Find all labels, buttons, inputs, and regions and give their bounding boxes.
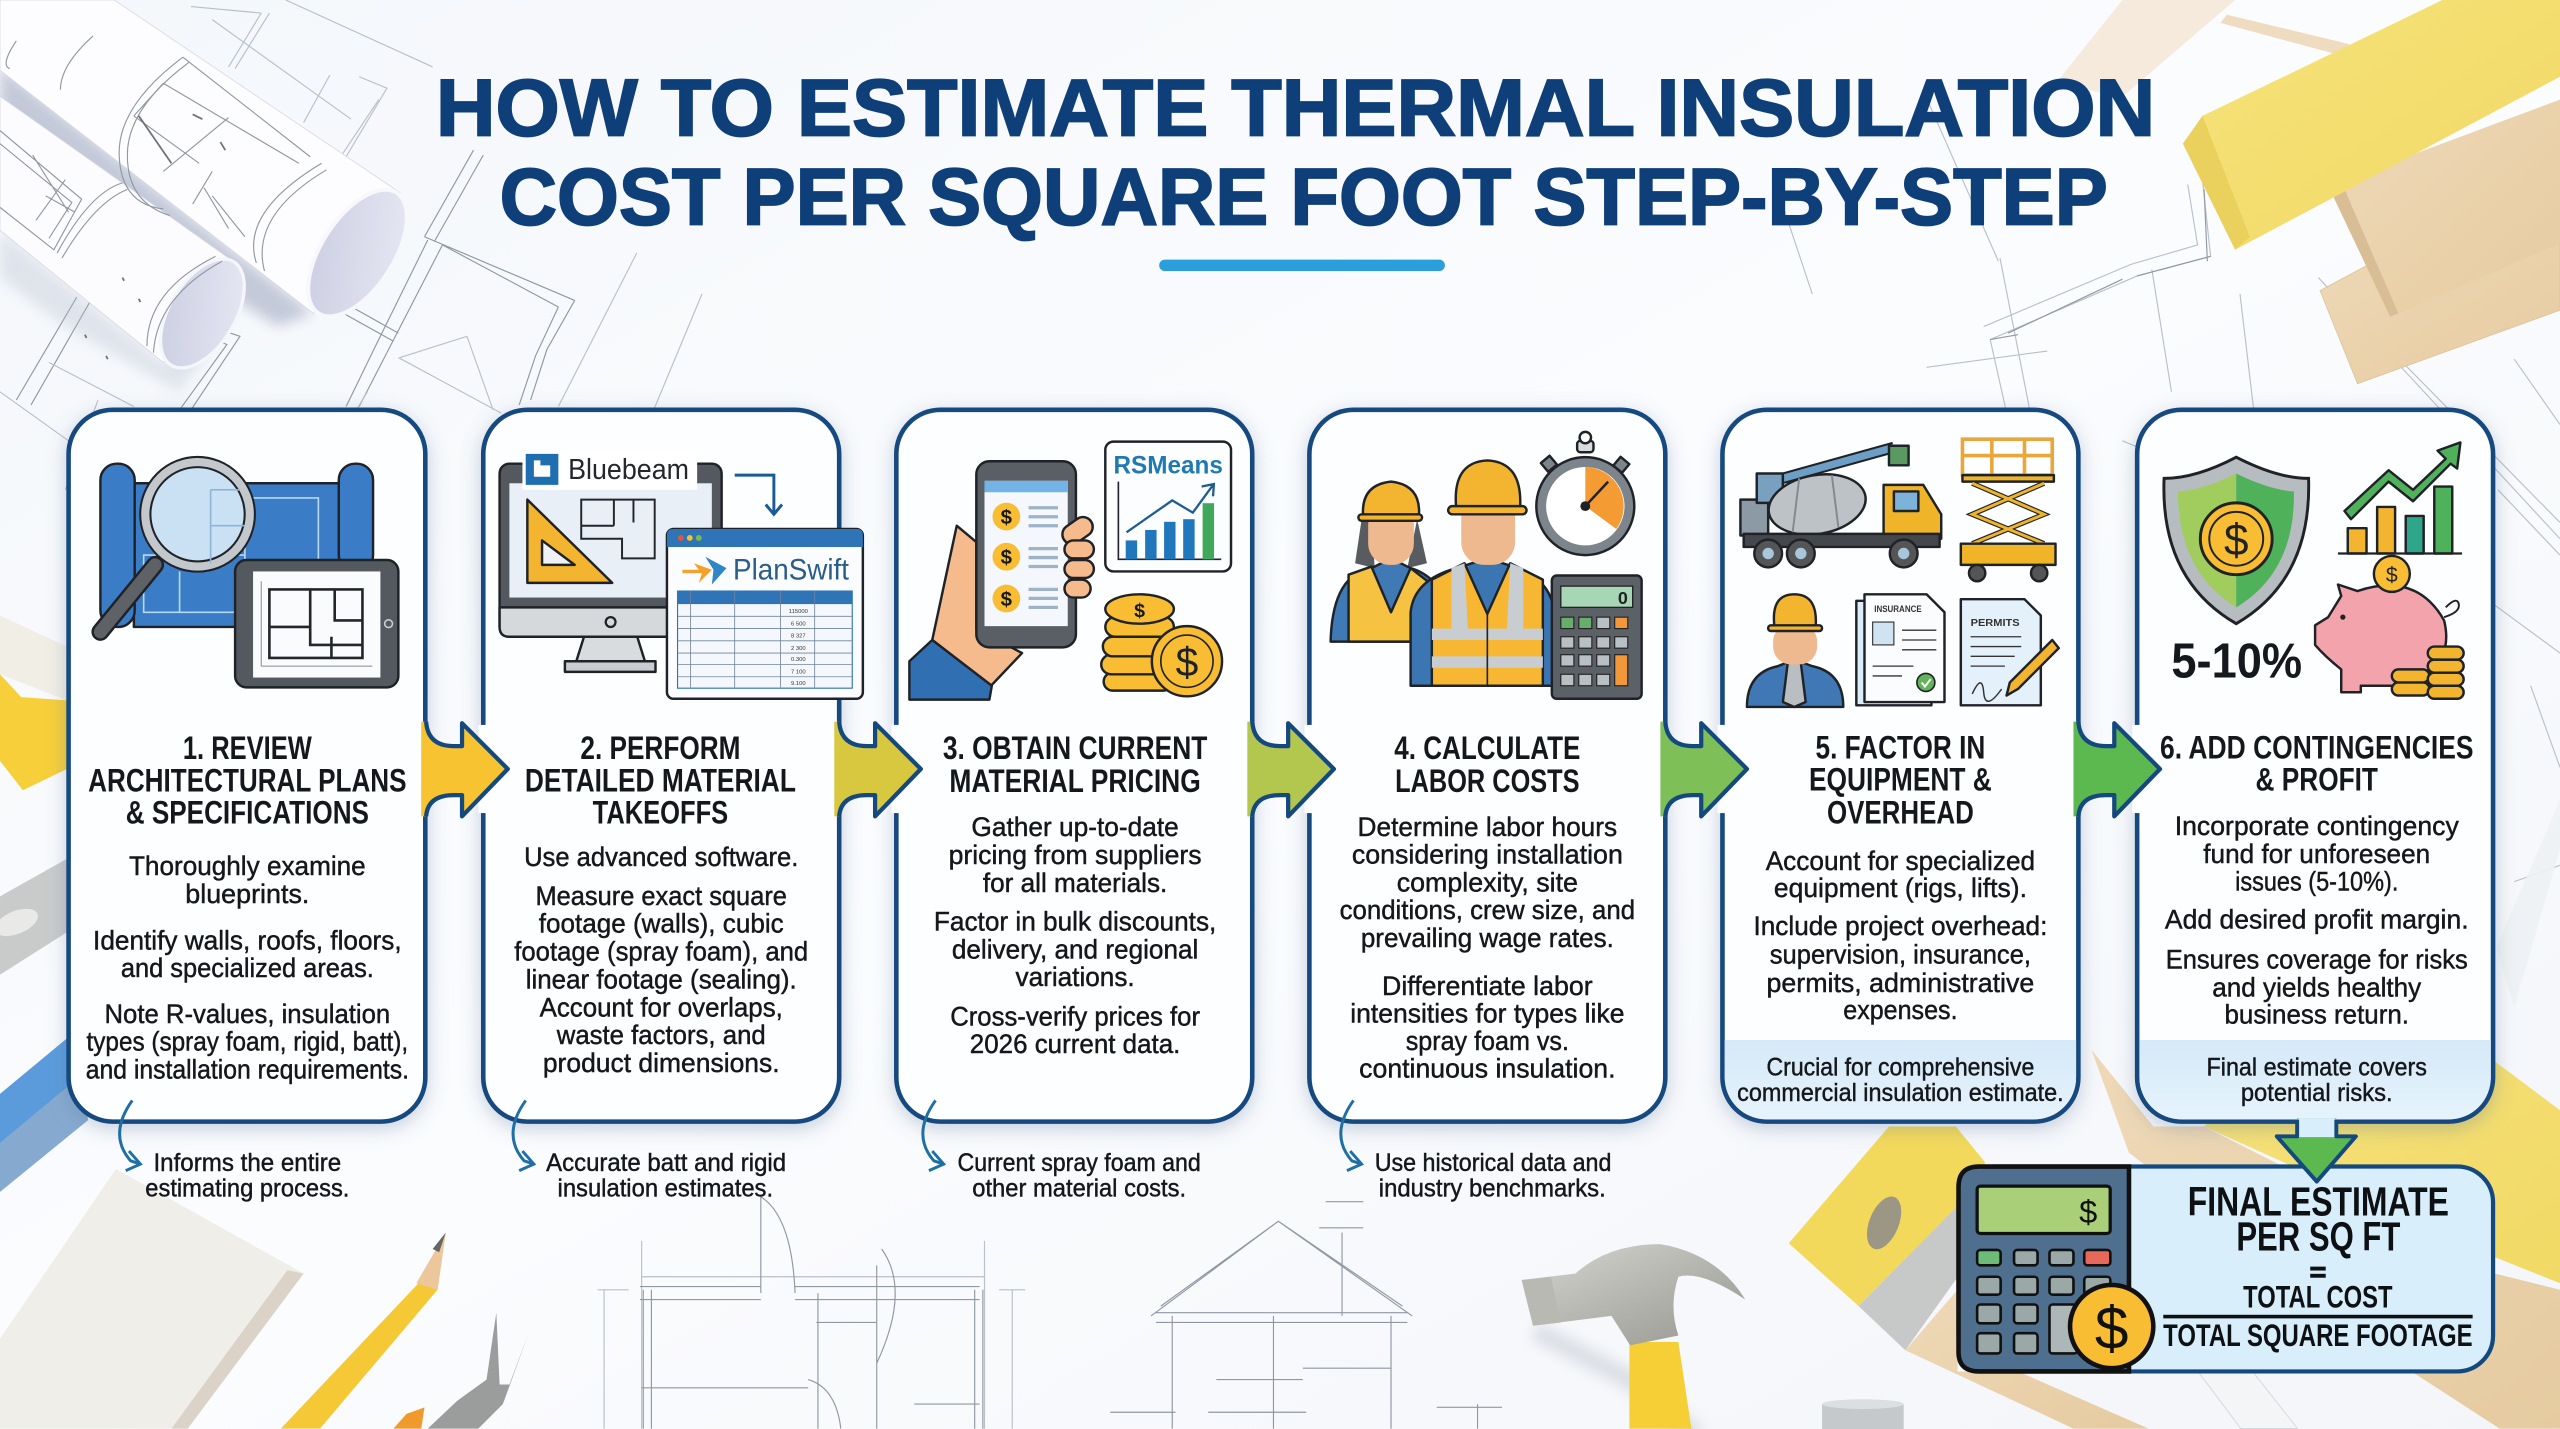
arrow: step 2 to 3 — [834, 722, 921, 816]
panel: step 5 equipment and overhead — [1722, 410, 2078, 1122]
caption: step 3 outcome: Current spray foam and — [958, 1149, 1201, 1177]
caption: step 1 outcome: estimating process. — [145, 1175, 349, 1203]
step 5 body text: supervision, insurance, — [1770, 939, 2031, 969]
step 1 heading: ARCHITECTURAL PLANS — [88, 762, 407, 799]
background: hammer — [1522, 1244, 1745, 1429]
icon: calculator with dollar coin: $ — [2095, 1294, 2128, 1362]
step 4 body text: prevailing wage rates. — [1361, 923, 1614, 953]
step 6 callout text — [2207, 1054, 2427, 1107]
step 1 heading: 1. REVIEW — [183, 729, 312, 766]
calculator: 0 — [1618, 588, 1628, 608]
step 1 heading: & SPECIFICATIONS — [126, 794, 369, 831]
icon: insurance document — [1856, 594, 1944, 705]
step 4 heading: LABOR COSTS — [1395, 762, 1580, 799]
step 5 callout band — [1725, 1040, 2076, 1119]
takeoff spreadsheet — [678, 591, 852, 688]
step 5 heading: OVERHEAD — [1827, 793, 1974, 830]
step 6 heading — [2160, 728, 2473, 798]
arrow: step 4 to 5 — [1660, 722, 1747, 816]
step 5 callout text: Crucial for comprehensive — [1767, 1054, 2034, 1082]
step 1 body text: blueprints. — [185, 879, 309, 909]
caption: step 3 outcome — [923, 1100, 1201, 1203]
step 4 body text: Determine labor hours — [1358, 812, 1617, 842]
step 6 callout text: Final estimate covers — [2207, 1054, 2427, 1082]
step 6 body text: Incorporate contingency — [2175, 811, 2459, 841]
stopwatch — [1536, 432, 1634, 555]
title underline — [1159, 260, 1445, 271]
arrow: step 3 to 4 — [1247, 722, 1334, 816]
step 5 body text: permits, administrative — [1767, 968, 2034, 998]
step 5 body text: expenses. — [1843, 995, 1958, 1025]
caption: step 2 outcome: insulation estimates. — [558, 1175, 773, 1203]
background: pliers — [393, 1313, 529, 1429]
caption: step 2 outcome — [513, 1100, 786, 1203]
takeoff spreadsheet: 9.100 — [791, 681, 806, 687]
step 1 body text: Note R-values, insulation — [104, 999, 390, 1029]
icon: concrete truck — [1740, 446, 1941, 567]
icon: hand with phone, RSMeans chart, coins: $ — [1176, 639, 1199, 685]
step 3 heading — [943, 729, 1207, 799]
panel: step 6 contingencies and profit — [2137, 410, 2493, 1122]
icon: piggy bank with coins — [2315, 556, 2464, 699]
takeoff spreadsheet: 0.300 — [791, 657, 806, 663]
icon: bar chart with arrow — [2338, 442, 2462, 553]
step 3 body text — [934, 812, 1216, 1059]
background: tools on the left edge — [0, 616, 304, 1429]
step 1 body text: types (spray foam, rigid, batt), — [87, 1027, 408, 1057]
step 6 heading: 6. ADD CONTINGENCIES — [2160, 728, 2473, 765]
Bluebeam logo: Bluebeam — [568, 454, 689, 486]
step 5 callout text — [1737, 1054, 2064, 1107]
title — [436, 64, 2155, 242]
step 4 body text: spray foam vs. — [1406, 1026, 1569, 1056]
caption: step 1 outcome: Informs the entire — [153, 1149, 341, 1177]
icon: hand with phone, RSMeans chart, coins: $ — [1134, 600, 1145, 622]
step 3 body text: variations. — [1016, 962, 1135, 992]
background: pencil — [281, 1233, 446, 1429]
calculator — [1552, 576, 1642, 699]
step 4 heading: 4. CALCULATE — [1394, 729, 1580, 766]
caption: step 4 outcome: Use historical data and — [1375, 1149, 1611, 1177]
icon: calculator with dollar coin — [1959, 1167, 2153, 1371]
step 3 body text: 2026 current data. — [970, 1029, 1180, 1059]
step 4 body text: Differentiate labor — [1382, 971, 1593, 1001]
takeoff spreadsheet: 6 500 — [791, 621, 806, 627]
step 5 body text: Account for specialized — [1766, 846, 2035, 876]
icon: blueprint, magnifier and tablet — [100, 462, 398, 687]
step 6 callout text: potential risks. — [2241, 1079, 2393, 1107]
5-10% label: 5-10% — [2171, 635, 2302, 689]
step 4 body text: considering installation — [1352, 840, 1623, 870]
panel: final estimate formula — [1959, 1167, 2493, 1371]
step 3 body text: delivery, and regional — [952, 934, 1198, 964]
takeoff spreadsheet: 8 327 — [791, 634, 806, 640]
step 1 body text: and installation requirements. — [86, 1054, 409, 1084]
icon: permits document: PERMITS — [1971, 618, 2020, 629]
front roll — [0, 0, 427, 333]
step 2 heading: 2. PERFORM — [580, 729, 740, 766]
male worker — [1411, 460, 1554, 686]
step 3 body text: pricing from suppliers — [949, 840, 1202, 870]
step 3 heading: MATERIAL PRICING — [949, 762, 1201, 799]
background: scraper, wood and foam bottom right — [1789, 800, 2560, 1429]
takeoff spreadsheet: 115000 — [789, 609, 809, 615]
takeoff spreadsheet: 7 100 — [791, 669, 806, 675]
roll shadows — [0, 65, 313, 327]
arrow: step 1 to 2 — [421, 722, 508, 816]
step 4 body text: conditions, crew size, and — [1340, 895, 1635, 925]
formula text: PER SQ FT — [2236, 1213, 2400, 1259]
female worker — [1331, 482, 1437, 642]
takeoff spreadsheet: 2 300 — [791, 646, 806, 652]
step 6 body text: issues (5-10%). — [2235, 866, 2398, 896]
arrow: step 6 to final estimate — [2277, 1118, 2356, 1182]
icon: monitor, Bluebeam and PlanSwift — [500, 452, 863, 699]
step 5 callout text: commercial insulation estimate. — [1737, 1079, 2064, 1107]
caption: step 3 outcome: other material costs. — [972, 1175, 1186, 1203]
step 4 body text: intensities for types like — [1350, 999, 1624, 1029]
background: can — [1822, 1399, 1904, 1429]
step 2 body text: Account for overlaps, — [540, 992, 783, 1022]
PlanSwift logo: PlanSwift — [733, 554, 849, 587]
step 2 heading: DETAILED MATERIAL — [525, 762, 796, 799]
step 1 body text — [86, 851, 409, 1084]
formula text: FINAL ESTIMATE — [2188, 1179, 2449, 1225]
step 2 body text: waste factors, and — [556, 1020, 766, 1050]
step 2 heading: TAKEOFFS — [593, 794, 728, 831]
icon: insurance document: INSURANCE — [1874, 604, 1922, 614]
step 2 heading — [525, 729, 796, 831]
icon: hand with phone, RSMeans chart, coins: $ — [1001, 547, 1013, 569]
step 1 body text: Identify walls, roofs, floors, — [93, 925, 402, 955]
panel: step 2 material takeoffs — [483, 410, 863, 1122]
step 5 heading — [1809, 728, 1992, 830]
caption: step 2 outcome: Accurate batt and rigid — [546, 1149, 786, 1177]
rear roll — [0, 96, 262, 382]
step 2 body text: product dimensions. — [543, 1048, 780, 1078]
panel: step 3 material pricing — [896, 410, 1252, 1122]
step 3 heading: 3. OBTAIN CURRENT — [943, 729, 1207, 766]
step 1 body text: and specialized areas. — [121, 953, 374, 983]
icon: permits document — [1961, 599, 2059, 705]
step 2 body text: footage (walls), cubic — [539, 909, 784, 939]
step 5 body text: equipment (rigs, lifts). — [1774, 873, 2027, 903]
background: rolled blueprints top left — [0, 0, 427, 392]
step 5 body text — [1753, 846, 2047, 1025]
formula text: TOTAL COST — [2243, 1279, 2393, 1314]
step 4 body text: continuous insulation. — [1359, 1054, 1616, 1084]
step 6 body text: Ensures coverage for risks — [2166, 944, 2468, 974]
step 4 body text — [1340, 812, 1635, 1084]
background: wood and foam boards top right — [2057, 0, 2560, 384]
step 1 body text: Thoroughly examine — [129, 851, 366, 881]
step 5 body text: Include project overhead: — [1753, 911, 2047, 941]
icon: shield with coin: $ — [2224, 516, 2249, 565]
step 6 body text: fund for unforeseen — [2203, 839, 2430, 869]
title: COST PER SQUARE FOOT STEP-BY-STEP — [500, 153, 2108, 242]
arrow: step 5 to 6 — [2073, 722, 2160, 816]
icon: shield with coin — [2164, 457, 2309, 624]
step 6 body text: and yields healthy — [2212, 973, 2422, 1003]
step 3 body text: Gather up-to-date — [971, 812, 1179, 842]
step 2 body text: linear footage (sealing). — [526, 964, 797, 994]
icon: workers, stopwatch, calculator — [1331, 432, 1642, 699]
step 6 body text: business return. — [2224, 999, 2409, 1029]
formula text — [2163, 1179, 2473, 1353]
step 4 body text: complexity, site — [1397, 867, 1578, 897]
icon: hand with phone, RSMeans chart, coins: $ — [1001, 507, 1013, 529]
step 5 heading: EQUIPMENT & — [1809, 761, 1992, 798]
step 5 heading: 5. FACTOR IN — [1816, 728, 1985, 765]
Bluebeam logo — [526, 454, 689, 486]
step 6 callout band — [2139, 1040, 2491, 1119]
icon: calculator with dollar coin: $ — [2079, 1193, 2097, 1230]
step 2 body text — [514, 842, 808, 1078]
icon: supervisor — [1747, 594, 1843, 707]
step 3 body text: Cross-verify prices for — [950, 1001, 1200, 1031]
icon: hand with phone, RSMeans chart, coins: RSMeans — [1113, 451, 1223, 479]
caption: step 4 outcome: industry benchmarks. — [1379, 1175, 1606, 1203]
step 6 body text: Add desired profit margin. — [2165, 904, 2469, 934]
step 6 body text — [2165, 811, 2469, 1029]
formula text: TOTAL SQUARE FOOTAGE — [2163, 1318, 2473, 1353]
caption: step 1 outcome — [120, 1100, 349, 1203]
step 2 body text: Measure exact square — [536, 881, 787, 911]
icon: hand with phone, RSMeans chart, coins: $ — [1001, 589, 1013, 611]
step 3 body text: for all materials. — [983, 868, 1167, 898]
step 2 body text: Use advanced software. — [524, 842, 798, 872]
title: HOW TO ESTIMATE THERMAL INSULATION — [436, 64, 2155, 154]
panel: step 4 labor costs — [1309, 410, 1665, 1122]
step 3 body text: Factor in bulk discounts, — [934, 907, 1216, 937]
step 6 heading: & PROFIT — [2256, 761, 2378, 798]
step 2 body text: footage (spray foam), and — [514, 936, 808, 966]
icon: piggy bank with coins: $ — [2386, 564, 2398, 587]
icon: scissor lift — [1961, 439, 2056, 581]
panel: step 1 review plans — [69, 410, 425, 1122]
icon: hand with phone, RSMeans chart, coins — [909, 442, 1231, 700]
step 1 heading — [88, 729, 407, 831]
step 4 heading — [1394, 729, 1580, 799]
PlanSwift logo — [682, 554, 849, 587]
caption: step 4 outcome — [1341, 1100, 1611, 1203]
